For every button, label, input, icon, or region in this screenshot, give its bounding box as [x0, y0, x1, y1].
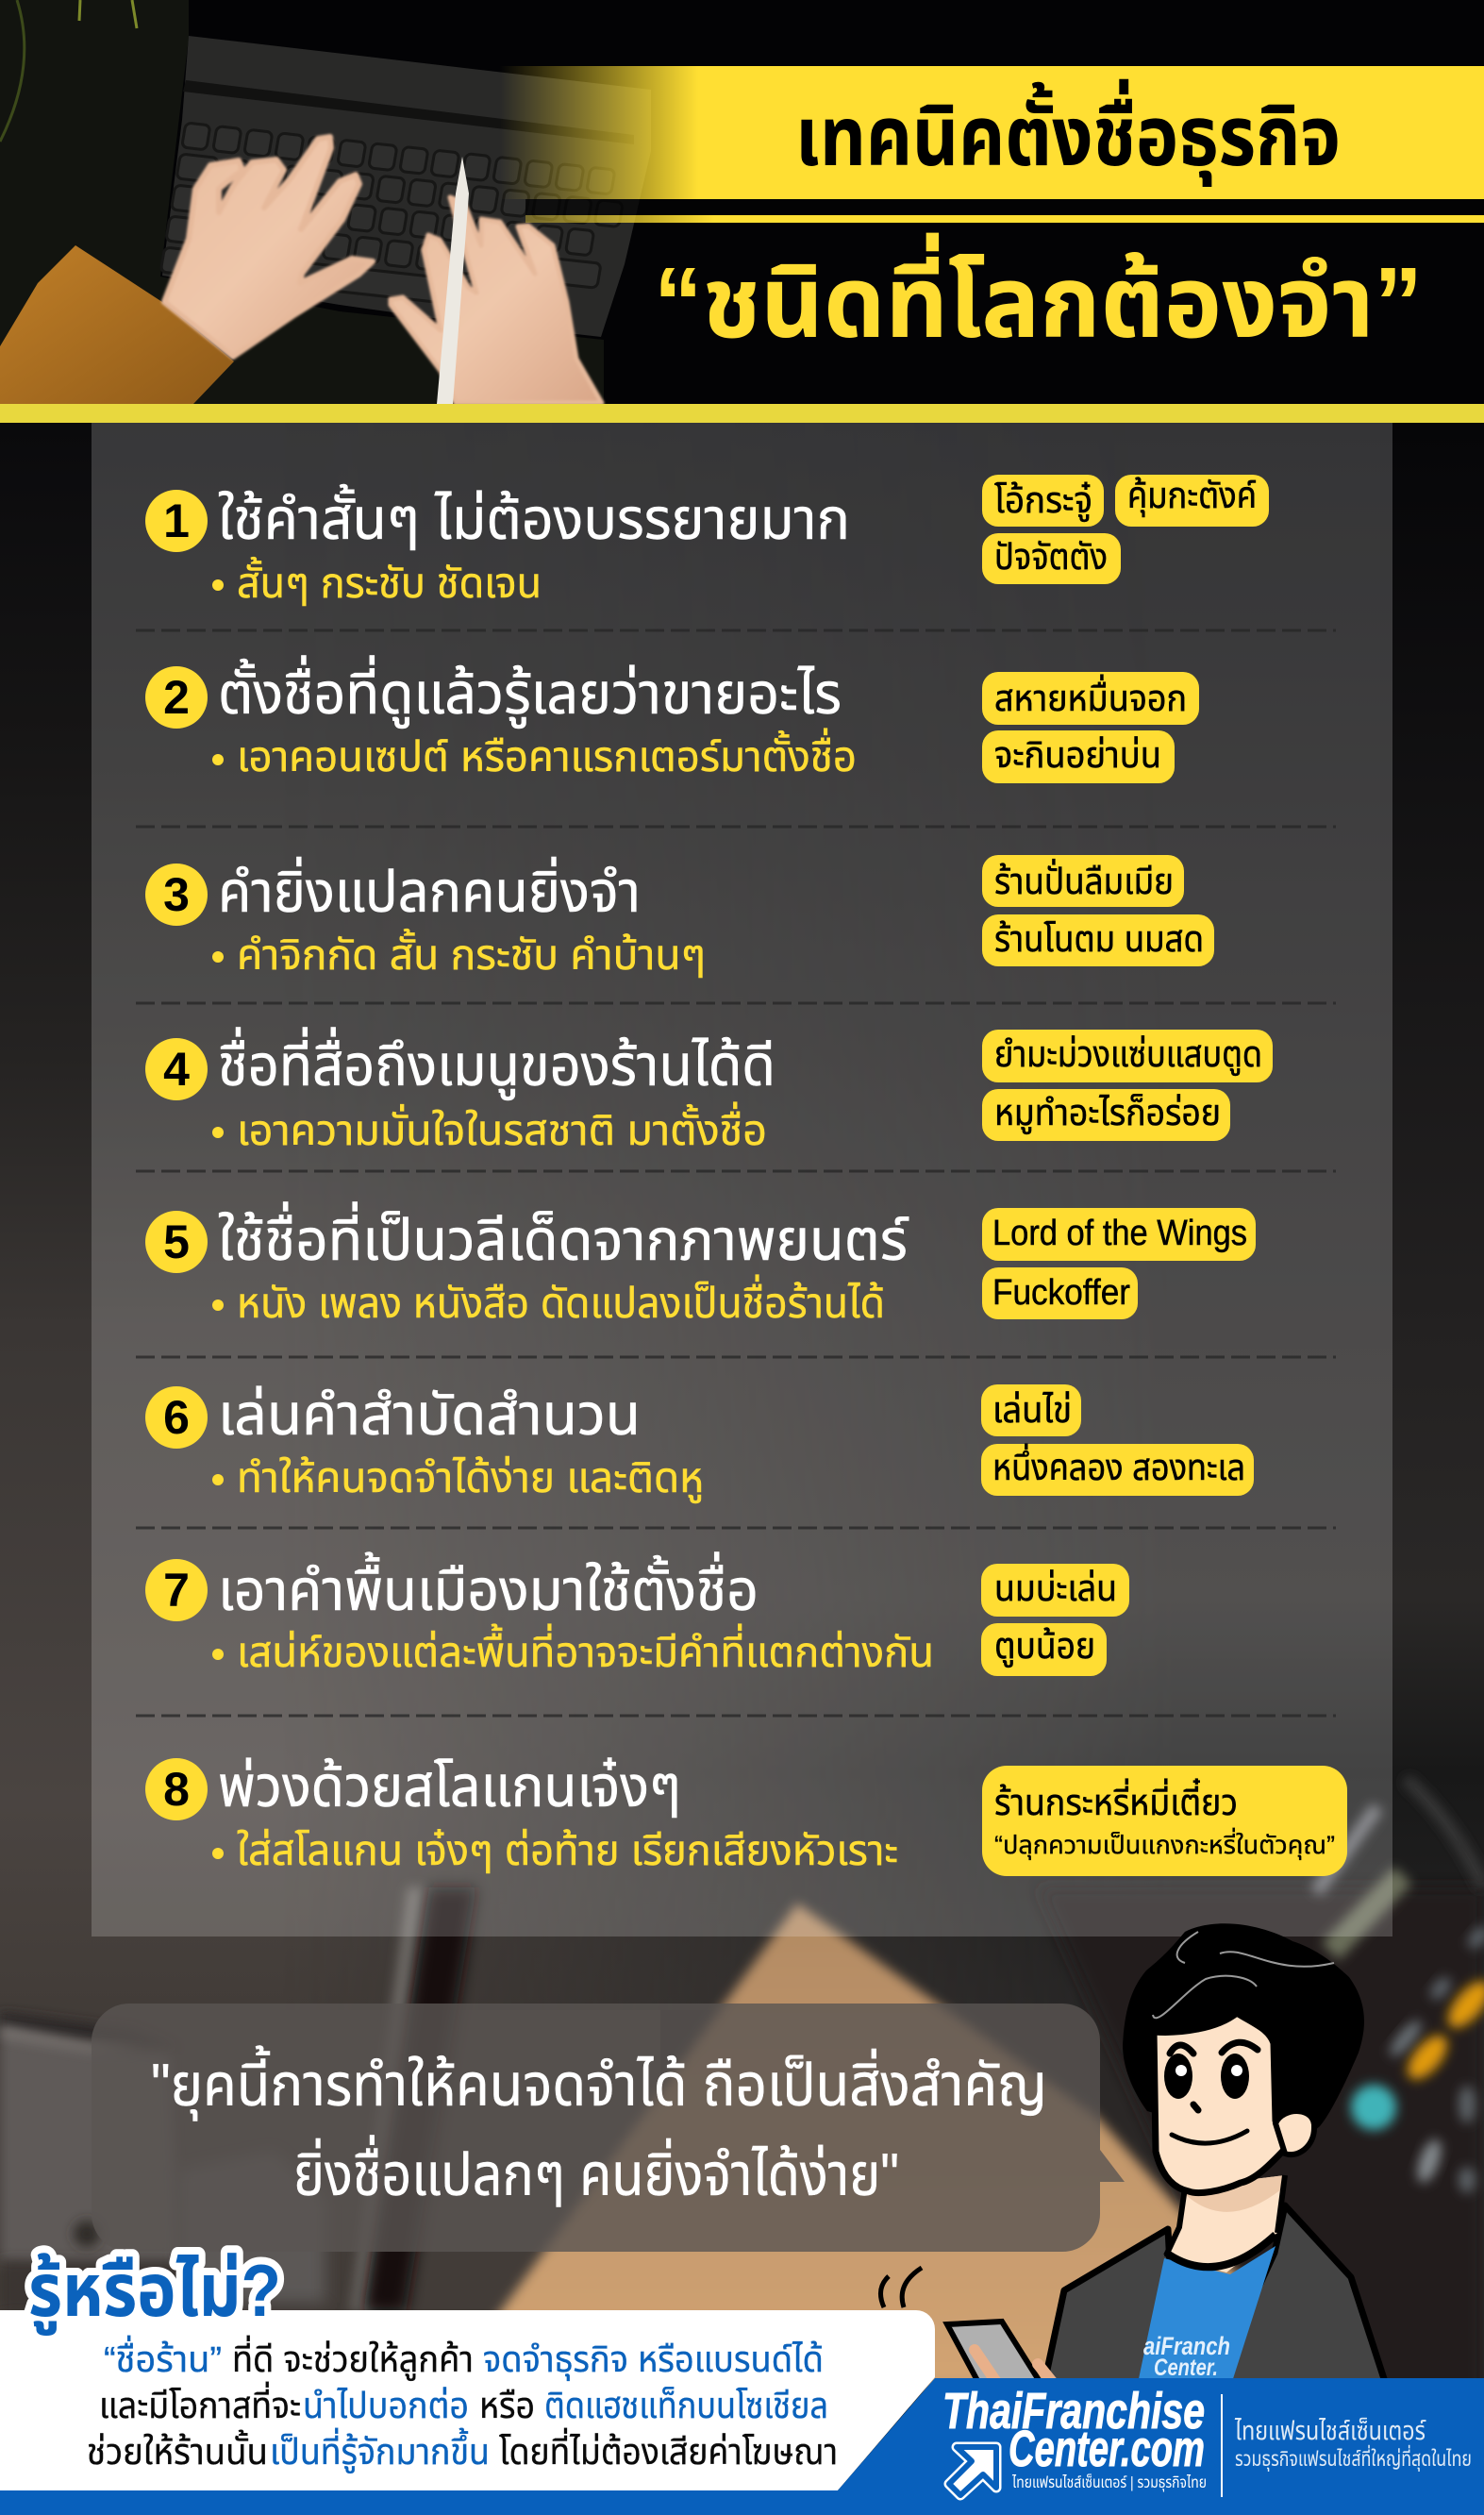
item 3: ร้านโนตม นมสด: [994, 920, 1204, 960]
right hand and stylus: [391, 157, 602, 404]
item 7: [145, 1551, 1129, 1676]
motion marks: [880, 2268, 922, 2307]
item 3: [145, 855, 1214, 979]
item 2: ตั้งชื่อที่ดูแล้วรู้เลยว่าขายอะไร: [218, 655, 842, 729]
phone and hand: [947, 2322, 1057, 2388]
paragraph: [87, 2335, 838, 2473]
item 8: “ปลุกความเป็นแกงกะหรี่ในตัวคุณ”: [994, 1827, 1335, 1860]
paragraph: ติดแฮชแท็กบนโซเชียล: [544, 2387, 828, 2426]
item 8: ร้านกระหรี่หมี่เตี๋ยว: [994, 1778, 1238, 1823]
item 3: คำยิ่งแปลกคนยิ่งจำ: [218, 857, 641, 924]
item 3: ร้านปั่นลืมเมีย: [994, 859, 1174, 902]
list panel: [92, 423, 1392, 1937]
item 4: หมูทำอะไรก็อร่อย: [994, 1094, 1221, 1134]
item 8: พ่วงด้วยสโลแกนเจ๋งๆ: [218, 1754, 681, 1819]
item 7: ตูบน้อย: [994, 1627, 1095, 1668]
face: [1154, 2013, 1285, 2193]
hair: [1123, 1923, 1364, 2152]
quote line 2: ยิ่งชื่อแปลกๆ คนยิ่งจำได้ง่าย": [293, 2135, 899, 2208]
jacket and shirt: [1043, 2205, 1387, 2388]
yellow divider: [0, 404, 1484, 423]
ear: [1276, 2111, 1314, 2155]
plant: [0, 0, 137, 142]
shirt logo text: aiFranch: [1143, 2332, 1230, 2360]
desk photo background: [0, 1779, 1484, 2406]
item 7: เอาคำพื้นเมืองมาใช้ตั้งชื่อ: [218, 1551, 759, 1622]
page background: [0, 423, 1484, 2406]
item 1: 1: [163, 495, 190, 547]
item 2: เอาคอนเซปต์ หรือคาแรกเตอร์มาตั้งชื่อ: [237, 728, 857, 780]
paragraph: และมีโอกาสที่จะ: [99, 2381, 301, 2426]
blue footer: Center.com: [1009, 2421, 1205, 2477]
paragraph: จดจำธุรกิจ หรือแบรนด์ได้: [483, 2340, 824, 2381]
item 4: ยำมะม่วงแซ่บแสบตูด: [994, 1035, 1262, 1076]
item 7: นมบ่ะเล่น: [994, 1569, 1117, 1609]
item 4: 4: [163, 1043, 190, 1096]
mascot character: Center.: [1154, 2355, 1218, 2381]
item 5: หนัง เพลง หนังสือ ดัดแปลงเป็นชื่อร้านได้: [237, 1274, 885, 1327]
item 2: [145, 655, 1199, 783]
item 8: 8: [163, 1763, 190, 1816]
item 1: ปัจจัตตัง: [994, 538, 1108, 578]
title line 1: เทคนิคตั้งชื่อธุรกิจ: [795, 78, 1341, 187]
item 1: คุ้มกะตังค์: [1127, 477, 1257, 517]
speech bubble: [92, 2004, 1125, 2252]
dashed separators: [136, 630, 1336, 1716]
item 5: Fuckoffer: [992, 1273, 1130, 1313]
item 4: เอาความมั่นใจในรสชาติ มาตั้งชื่อ: [237, 1101, 767, 1154]
item 7: 7: [163, 1564, 190, 1617]
tagline: ไทยแฟรนไชส์เซ็นเตอร์: [1234, 2416, 1426, 2445]
item 4: [145, 1027, 1273, 1154]
item 1: โอ้กระจู๋: [994, 481, 1092, 522]
item 5: Lord of the Wings: [992, 1214, 1247, 1253]
paragraph: นำไปบอกต่อ: [303, 2387, 469, 2426]
paragraph: เป็นที่รู้จักมากขึ้น: [270, 2427, 490, 2473]
title line 2: “ชนิดที่โลกต้องจำ”: [654, 233, 1423, 359]
icon: arrow: [949, 2447, 996, 2495]
neck: [1166, 2175, 1285, 2272]
paragraph: ช่วยให้ร้านนั้น: [87, 2429, 268, 2473]
item 6: หนึ่งคลอง สองทะเล: [992, 1443, 1245, 1488]
title band: [500, 66, 1484, 359]
item 8: [145, 1754, 1347, 1876]
mascot character: [880, 1923, 1387, 2388]
paragraph: ที่ดี จะช่วยให้ลูกค้า: [232, 2335, 474, 2381]
sleeve: [0, 245, 234, 404]
logo wordmark: ThaiFranchise: [942, 2383, 1205, 2440]
item 7: เสน่ห์ของแต่ละพื้นที่อาจจะมีคำที่แตกต่างกัน: [237, 1623, 934, 1676]
paragraph: โดยที่ไม่ต้องเสียค่าโฆษณา: [499, 2427, 838, 2473]
blue footer: ไทยแฟรนไชส์เซ็นเตอร์ | รวมธุรกิจไทย: [1011, 2473, 1207, 2492]
item 6: เล่นคำสำบัดสำนวน: [218, 1383, 641, 1447]
item 8: ใส่สโลแกน เจ๋งๆ ต่อท้าย เรียกเสียงหัวเราะ: [237, 1826, 898, 1874]
heading: รู้หรือไม่?: [28, 2249, 281, 2336]
keyboard: [160, 36, 651, 337]
did-you-know box: [0, 2249, 935, 2490]
item 3: คำจิกกัด สั้น กระชับ คำบ้านๆ: [237, 929, 706, 979]
item 5: [145, 1201, 1256, 1327]
item 5: 5: [163, 1216, 190, 1268]
brows nose mouth: [1170, 2042, 1258, 2143]
paragraph: “ชื่อร้าน”: [104, 2335, 222, 2380]
item 1: [145, 475, 1269, 607]
item 2: 2: [163, 671, 190, 724]
device lights: [1351, 2085, 1396, 2130]
item 2: จะกินอย่าบ่น: [994, 736, 1161, 776]
header photo: hands on keyboard: [0, 0, 1484, 404]
item 1: ใช้คำสั้นๆ ไม่ต้องบรรยายมาก: [218, 483, 850, 551]
blue footer: [0, 2378, 1484, 2515]
item 1: สั้นๆ กระชับ ชัดเจน: [237, 557, 542, 607]
item 4: ชื่อที่สื่อถึงเมนูของร้านได้ดี: [218, 1027, 775, 1100]
item 2: สหายหมื่นจอก: [994, 674, 1187, 719]
item 6: 6: [163, 1391, 190, 1444]
stylus pen: [437, 157, 469, 404]
item 6: เล่นไข่: [992, 1391, 1072, 1431]
item 6: [145, 1383, 1254, 1503]
collar: [1166, 2235, 1276, 2267]
eyes: [1164, 2054, 1249, 2099]
left hand: [164, 137, 373, 357]
quote line 1: "ยุคนี้การทำให้คนจดจำได้ ถือเป็นสิ่งสำคัญ: [151, 2045, 1047, 2121]
item 3: 3: [163, 868, 190, 921]
separator: [1221, 2394, 1223, 2497]
paragraph: หรือ: [479, 2387, 535, 2426]
item 5: ใช้ชื่อที่เป็นวลีเด็ดจากภาพยนตร์: [218, 1201, 909, 1272]
item 6: ทำให้คนจดจำได้ง่าย และติดหู: [237, 1453, 704, 1503]
hair highlights: [1153, 1932, 1334, 2018]
